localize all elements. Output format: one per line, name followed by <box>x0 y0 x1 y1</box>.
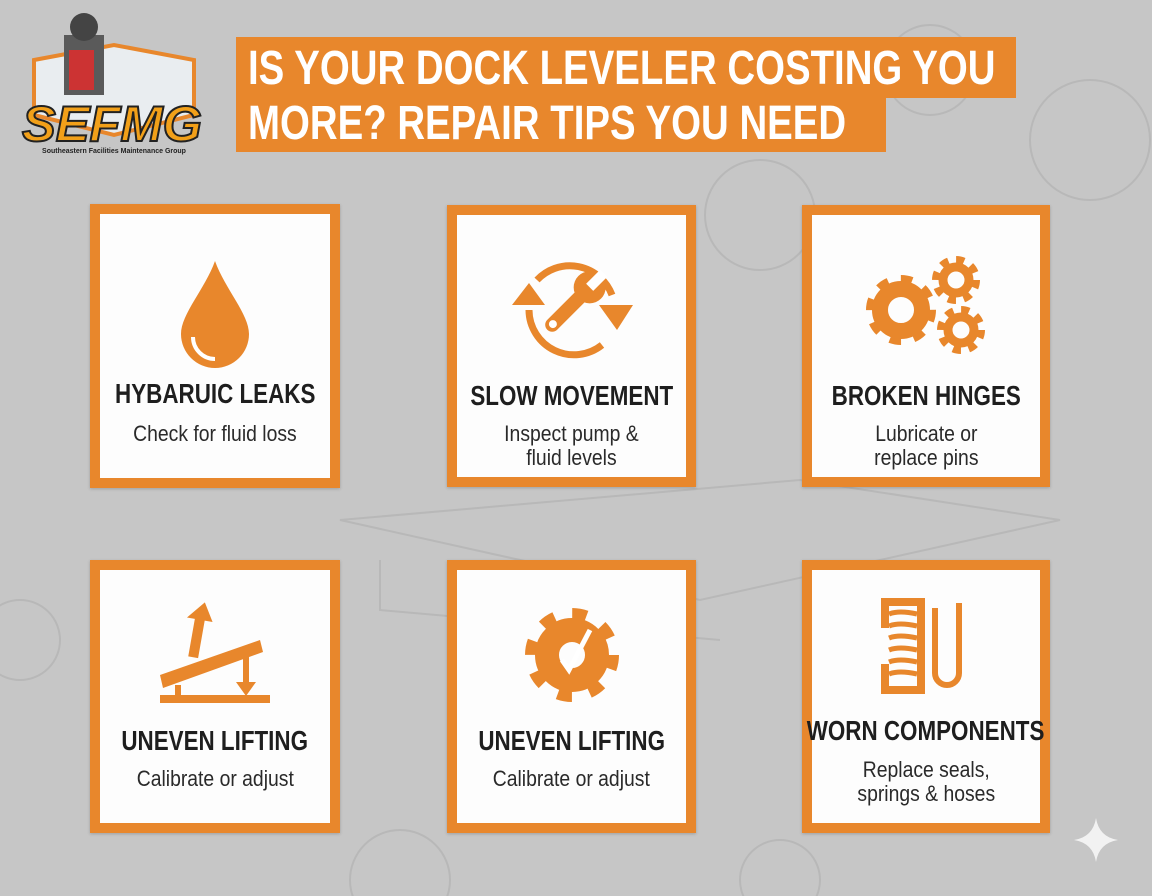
icon: tilted lift <box>160 602 270 703</box>
icon: sparkle <box>1074 818 1118 862</box>
icon: gear check <box>525 608 619 702</box>
logo: SEFMG <box>22 96 202 152</box>
card: worn components: WORN COMPONENTS <box>807 715 1045 746</box>
logo: Southeastern Facilities Maintenance Group <box>42 148 186 155</box>
card: uneven lifting 2: UNEVEN LIFTING <box>478 725 665 756</box>
title <box>236 37 1016 152</box>
icon: drop <box>181 261 249 368</box>
card: hydraulic leaks: HYBARUIC LEAKS <box>115 378 315 409</box>
card: slow movement: Inspect pump & <box>504 421 639 446</box>
card: uneven lifting 1 <box>90 560 340 833</box>
card: broken hinges: BROKEN HINGES <box>831 380 1021 411</box>
card: slow movement: SLOW MOVEMENT <box>470 380 673 411</box>
card: uneven lifting 1: UNEVEN LIFTING <box>122 725 308 756</box>
card: slow movement <box>447 205 696 487</box>
card: broken hinges: replace pins <box>874 445 978 470</box>
card: uneven lifting 2 <box>447 560 696 833</box>
card: broken hinges: Lubricate or <box>875 421 977 446</box>
card: worn components: Replace seals, <box>863 757 989 782</box>
card: hydraulic leaks <box>90 204 340 488</box>
card: broken hinges <box>802 205 1050 487</box>
card: slow movement: fluid levels <box>526 445 617 470</box>
card: worn components: springs & hoses <box>857 781 995 806</box>
card: worn components <box>802 560 1050 833</box>
icon: gears <box>866 256 985 354</box>
card: uneven lifting 1: Calibrate or adjust <box>136 766 294 791</box>
icon: spring and hose <box>881 598 962 694</box>
logo <box>22 13 202 155</box>
icon: wrench cycle <box>512 262 633 358</box>
title: MORE? REPAIR TIPS YOU NEED <box>248 98 846 150</box>
title: IS YOUR DOCK LEVELER COSTING YOU <box>248 42 995 95</box>
card: hydraulic leaks: Check for fluid loss <box>133 421 297 446</box>
card: uneven lifting 2: Calibrate or adjust <box>493 766 650 791</box>
